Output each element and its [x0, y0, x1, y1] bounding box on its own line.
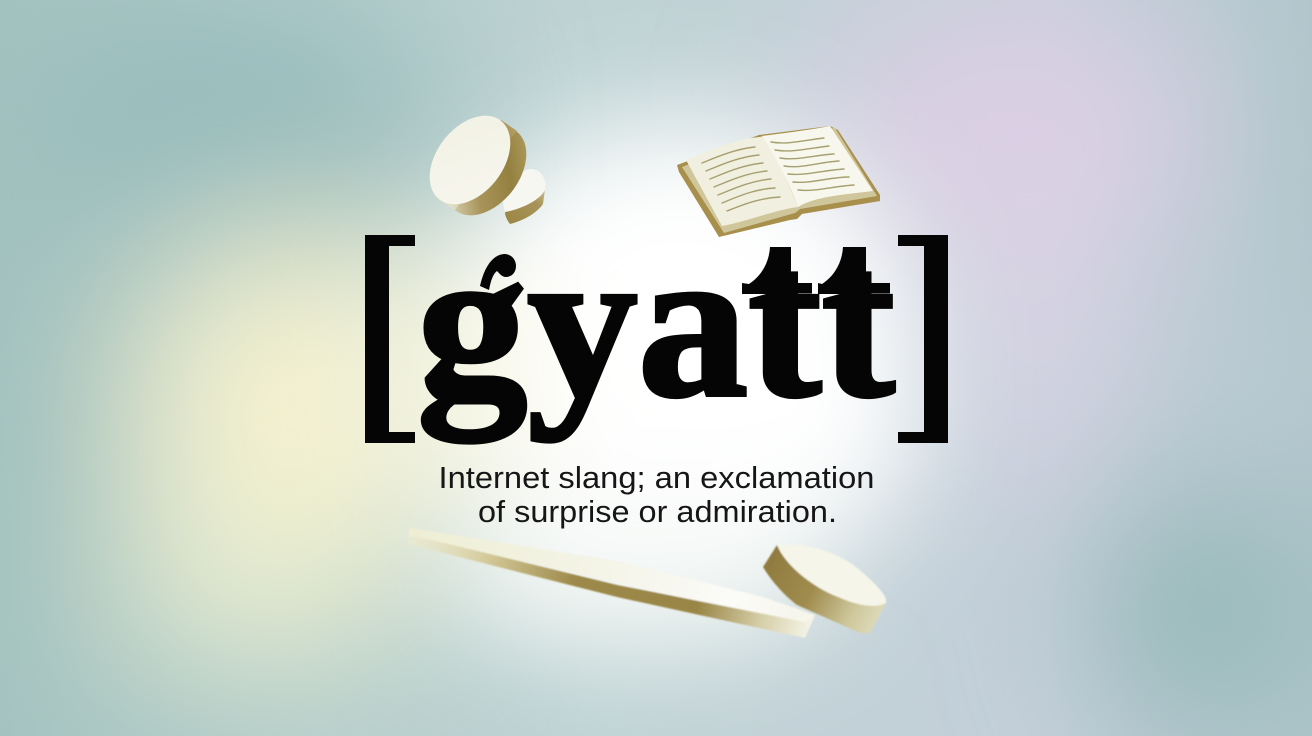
icon: long bar: [408, 528, 815, 638]
icon: open book: [677, 126, 880, 237]
book text lines: [702, 138, 854, 211]
left page: [686, 137, 798, 226]
left bracket: [365, 235, 415, 443]
book page block: [682, 128, 877, 233]
icon: lower puck: [763, 544, 886, 633]
subtitle text: of surprise or admiration.: [478, 495, 837, 529]
book cover: [677, 126, 880, 237]
right page: [762, 126, 873, 207]
title word: [365, 203, 948, 443]
word gyatt: gyatt: [417, 203, 895, 443]
right bracket: [898, 235, 948, 443]
icon: floating pucks: [413, 100, 545, 231]
g ear and t stems: [480, 247, 890, 294]
subtitle text: Internet slang; an exclamation: [438, 461, 874, 495]
small puck: [503, 169, 545, 224]
subtitle text: [438, 461, 874, 529]
large puck: [413, 100, 543, 231]
